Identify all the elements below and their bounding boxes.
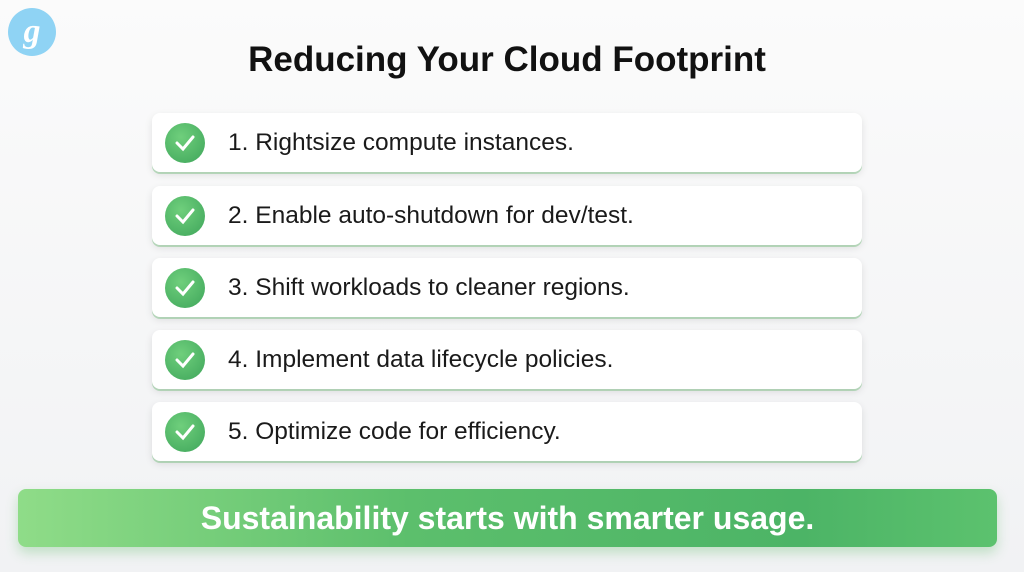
icon: logo (8, 8, 56, 56)
card 2: 2. Enable auto-shutdown for dev/test. (228, 202, 634, 229)
title: Reducing Your Cloud Footprint (248, 40, 766, 79)
icon: logo: g (24, 13, 40, 50)
card 4: 4. Implement data lifecycle policies. (228, 346, 613, 373)
card 2 (152, 186, 862, 245)
card 5 (152, 402, 862, 461)
card 4 (152, 330, 862, 389)
card 5: 5. Optimize code for efficiency. (228, 418, 561, 445)
card 1 (152, 113, 862, 172)
card 1: 1. Rightsize compute instances. (228, 129, 574, 156)
card 3: 3. Shift workloads to cleaner regions. (228, 274, 630, 301)
banner: Sustainability starts with smarter usage. (201, 500, 814, 536)
banner (18, 489, 997, 547)
card 3 (152, 258, 862, 317)
